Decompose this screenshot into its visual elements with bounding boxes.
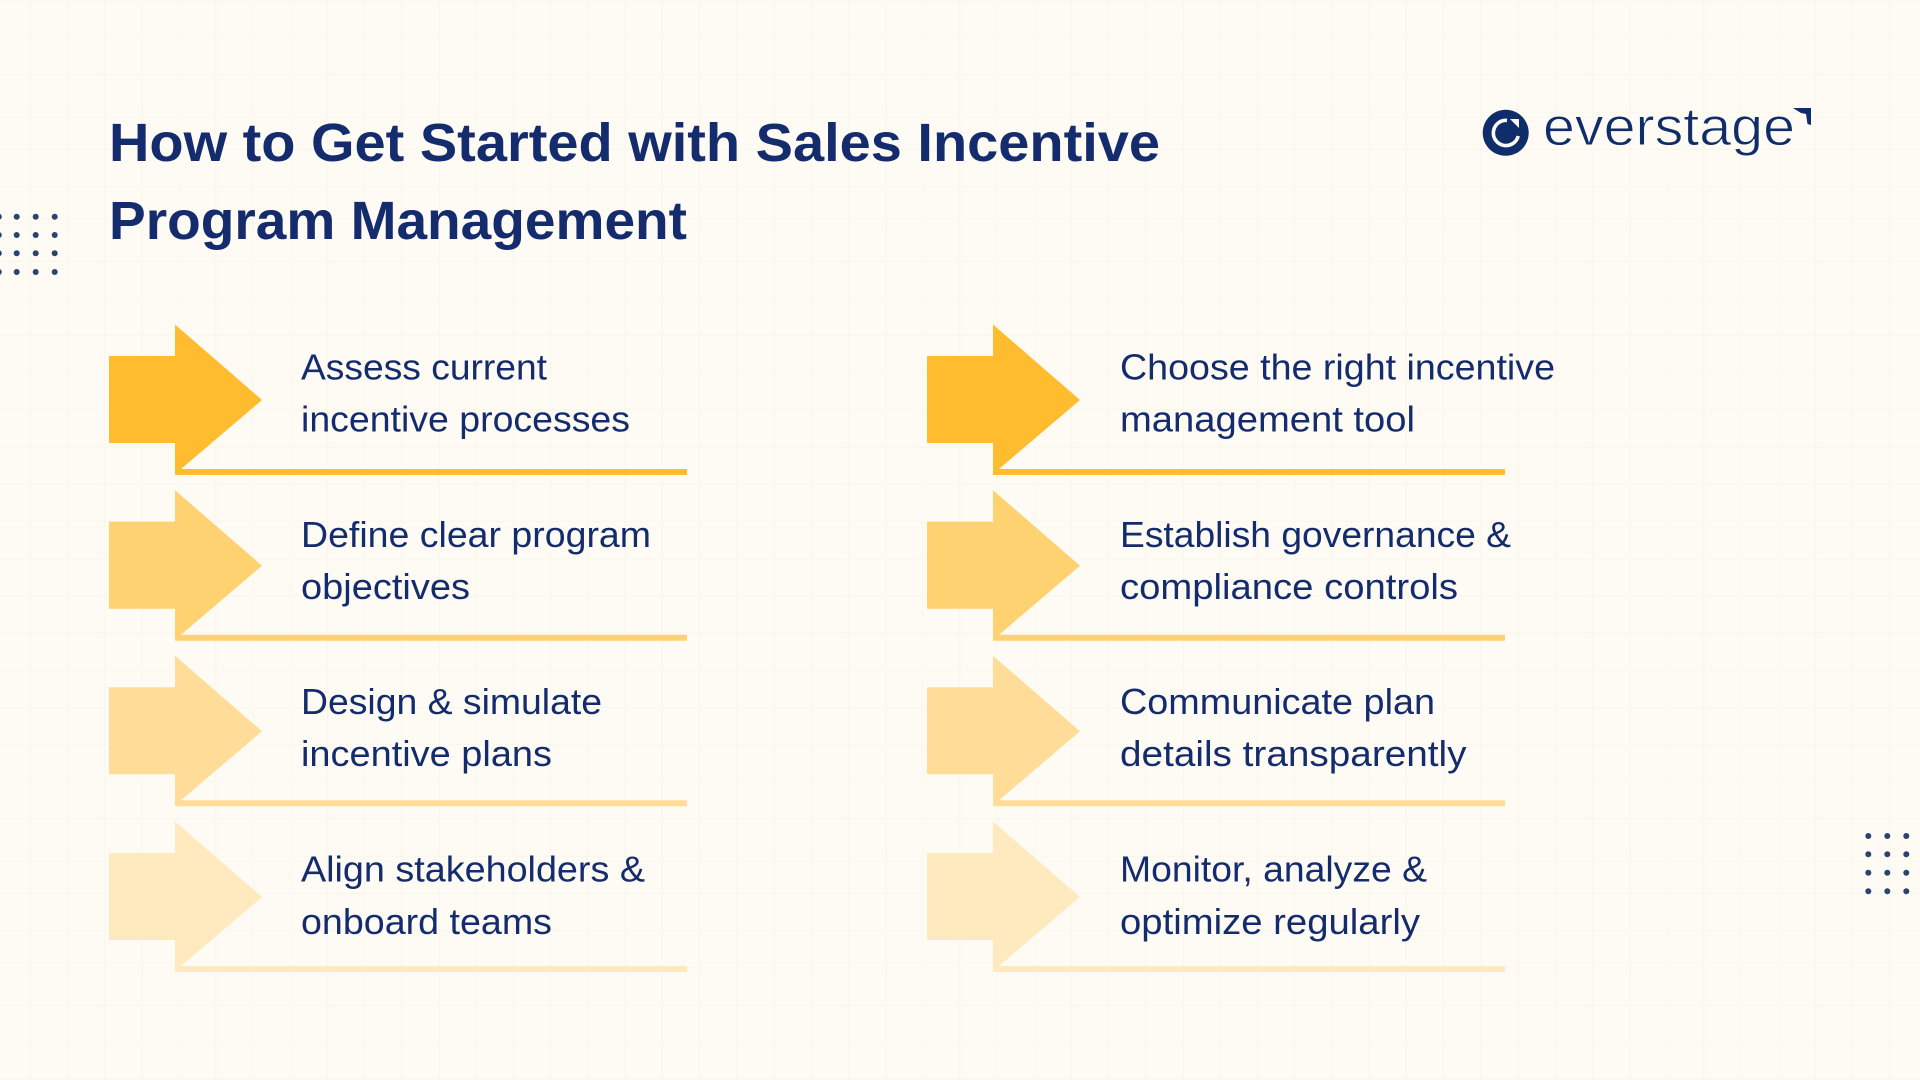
text 8: Monitor, analyze &: [1120, 849, 1427, 890]
text 4: Align stakeholders &: [301, 849, 645, 890]
text 3: Design & simulate: [301, 681, 602, 722]
step 5: choose the right incentive management tool: [927, 324, 1555, 475]
arrow 6: [927, 490, 1505, 641]
step 4: align stakeholders and onboard teams: [109, 822, 687, 972]
arrow 4: [109, 822, 687, 972]
arrow 3: [109, 656, 687, 806]
decorative dots: right: [1865, 833, 1909, 894]
text 2: objectives: [301, 566, 470, 607]
arrow 5: [927, 324, 1505, 475]
step 8: monitor, analyze and optimize regularly: [927, 822, 1505, 972]
title: [109, 113, 1160, 251]
arrow 1: [109, 324, 687, 475]
text 8: optimize regularly: [1120, 901, 1420, 942]
arrow 2: [109, 490, 687, 641]
step 6: establish governance and compliance controls: [927, 490, 1511, 641]
arrow 8: [927, 822, 1505, 972]
text 6: compliance controls: [1120, 566, 1458, 607]
text 1: incentive processes: [301, 398, 630, 440]
step 1: assess current incentive processes: [109, 324, 687, 475]
icon: logo corner tick: [1793, 108, 1811, 125]
logo: everstage: [1483, 97, 1811, 157]
text 2: Define clear program: [301, 514, 651, 555]
logo wordmark: everstage: [1543, 97, 1795, 157]
text 5: Choose the right incentive: [1120, 346, 1555, 388]
text 1: Assess current: [301, 346, 547, 388]
step 3: design and simulate incentive plans: [109, 656, 687, 806]
icon: logo mark: [1483, 110, 1529, 156]
title: How to Get Started with Sales Incentive: [109, 113, 1160, 173]
title: Program Management: [109, 191, 687, 251]
decorative dots: left: [0, 214, 58, 275]
step 2: define clear program objectives: [109, 490, 687, 641]
text 7: details transparently: [1120, 733, 1466, 774]
text 6: Establish governance &: [1120, 514, 1511, 555]
text 5: management tool: [1120, 398, 1415, 440]
step 7: communicate plan details transparently: [927, 656, 1505, 806]
arrow 7: [927, 656, 1505, 806]
text 3: incentive plans: [301, 733, 552, 774]
text 7: Communicate plan: [1120, 681, 1435, 722]
text 4: onboard teams: [301, 901, 552, 942]
